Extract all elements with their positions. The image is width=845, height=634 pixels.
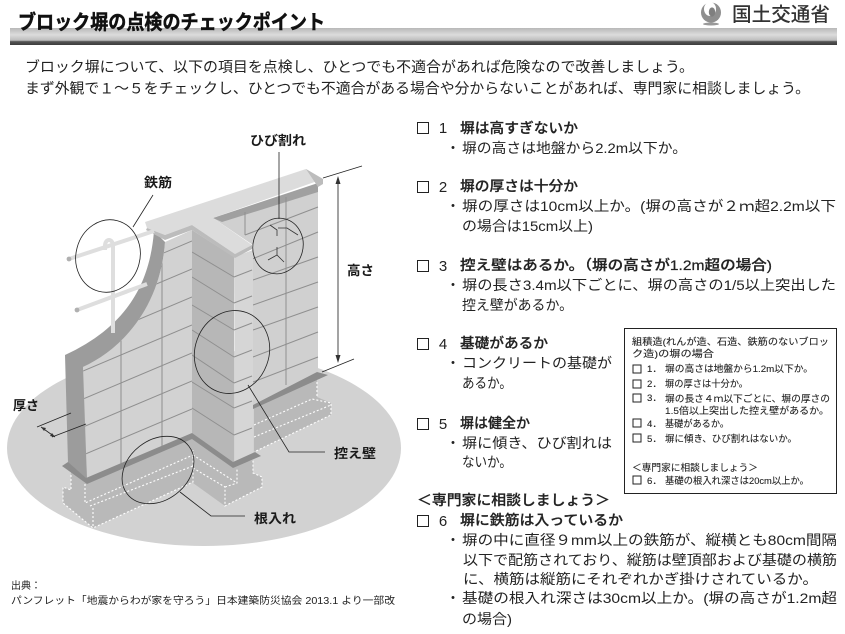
checklist item 2: 塀の厚さは十分か: [460, 178, 578, 194]
header band: [10, 28, 837, 45]
intro text: まず外観で１～５をチェックし、ひとつでも不適合がある場合や分からないことがあれば、専門家に相談しましょう。: [25, 80, 810, 98]
checklist item 2: の場合は15cm以上): [462, 218, 593, 234]
label: 鉄筋: 鉄筋: [144, 175, 172, 190]
leader lines: [133, 152, 325, 516]
checklist item 5: ないか。: [462, 454, 512, 470]
cut section band: [65, 231, 165, 480]
note items: 塀の長さ４ｍ以下ごとに、塀の厚さの: [665, 393, 830, 405]
pier side bricks: [192, 252, 234, 435]
checklist item 3: 塀の長さ3.4m以下ごとに、塀の高さの1/5以上突出した: [462, 277, 836, 293]
note items: 5．: [647, 434, 662, 445]
checklist item 6: 6: [439, 513, 447, 530]
checklist item 3: 控え壁があるか。: [462, 297, 573, 313]
circle: crack: [247, 212, 309, 280]
label: 根入れ: 根入れ: [254, 511, 296, 526]
thickness dimension: [37, 413, 86, 437]
note items: 2．: [647, 379, 662, 390]
checklist item 6: 基礎の根入れ深さは30cm以上か。(塀の高さが1.2m超: [462, 590, 837, 606]
logo: 国土交通省: [701, 2, 830, 26]
checklist item 1: ・: [446, 140, 460, 156]
circle: buttress: [183, 300, 281, 404]
checklist item 3: 控え壁はあるか。（塀の高さが1.2m超の場合): [460, 257, 772, 273]
pier front face: [234, 250, 253, 465]
checklist item 2: 塀の厚さは10cm以上か。(塀の高さが２ｍ超2.2m以下: [462, 198, 836, 214]
checklist item 6: 塀に鉄筋は入っているか: [460, 512, 623, 528]
heading: consult an expert: ＜専門家に相談しましょう＞: [417, 492, 610, 508]
source citation: パンフレット「地震からわが家を守ろう」日本建築防災協会 2013.1 より一部改: [11, 594, 395, 607]
note items: 基礎があるか。: [665, 418, 729, 430]
checklist item 1: 塀の高さは地盤から2.2m以下か。: [462, 140, 687, 156]
note items: 塀の厚さは十分か。: [665, 378, 748, 390]
checklist item 6: 塀の中に直径９mm以上の鉄筋が、縦横とも80cm間隔: [462, 532, 837, 548]
right wall face: [213, 184, 318, 405]
pier foundation: [193, 435, 262, 506]
checklist item 4: あるか。: [462, 375, 512, 391]
right wall bricks: [245, 197, 318, 385]
pier front bricks: [234, 270, 252, 435]
wall base band: [62, 372, 328, 484]
height dimension: [322, 166, 362, 372]
logo: 国土交通省: 国土交通省: [732, 4, 830, 26]
panel: masonry wall note: [624, 328, 836, 494]
checklist item 6: ・: [446, 532, 460, 548]
checklist item 3: [418, 257, 836, 313]
checklist item 2: ・: [446, 198, 460, 214]
checklist item 4: コンクリートの基礎が: [462, 355, 612, 371]
label: 控え壁: 控え壁: [334, 446, 376, 461]
note items: 基礎の根入れ深さは20cm以上か。: [665, 475, 809, 487]
checklist item 4: ・: [446, 355, 460, 371]
note items: 1.5倍以上突出した控え壁があるか。: [665, 405, 829, 417]
source citation: 出典：: [11, 579, 41, 592]
panel: masonry wall note: ク造)の塀の場合: [632, 348, 714, 360]
circle: embedment: [109, 422, 207, 518]
note items: 6．: [647, 476, 662, 487]
checklist item 3: 3: [439, 258, 447, 275]
cap edge: [146, 169, 323, 258]
checklist item 2: [418, 178, 836, 234]
checklist item 6: に、横筋は縦筋にそれぞれかぎ掛けされているか。: [463, 571, 818, 587]
left wall face: [83, 230, 192, 480]
checklist item 1: 1: [439, 120, 447, 137]
note items: 塀の高さは地盤から1.2m以下か。: [665, 363, 813, 375]
illustration: block wall diagram: [7, 133, 401, 546]
checklist item 5: 5: [439, 416, 447, 433]
pier side face: [192, 230, 234, 465]
left wall bricks: [83, 240, 192, 465]
intro text: ブロック塀について、以下の項目を点検し、ひとつでも不適合があれば危険なので改善しましょう。: [25, 58, 694, 76]
checklist item 6: 以下で配筋されており、縦筋は壁頂部および基礎の横筋: [463, 552, 837, 568]
note items: 3．: [647, 393, 662, 404]
ground ellipse: [7, 350, 401, 546]
crack lines: [268, 225, 298, 262]
checklist item 4: [418, 335, 612, 391]
label: ひび割れ: ひび割れ: [250, 133, 306, 148]
checklist item 6: の場合): [462, 611, 512, 627]
rebar end caps: [67, 257, 79, 312]
note items: ＜専門家に相談しましょう＞: [632, 462, 758, 474]
right wall cap shadow: [213, 183, 318, 222]
right foundation: [254, 378, 331, 452]
checklist item 4: 基礎があるか: [460, 335, 548, 351]
note items: 塀に傾き、ひび割れはないか。: [665, 433, 797, 445]
foundation dotted outlines: [63, 382, 331, 528]
wall cap: [145, 169, 323, 254]
checklist item 5: ・: [446, 435, 460, 451]
circle: rebar: [68, 212, 148, 300]
label: 高さ: 高さ: [347, 263, 374, 278]
checklist item 5: 塀に傾き、ひび割れは: [462, 435, 612, 451]
checklist item 4: 4: [439, 336, 447, 353]
intro text: [25, 58, 810, 98]
checklist item 1: [418, 120, 687, 156]
checklist item 2: 2: [439, 179, 447, 196]
title: ブロック塀の点検のチェックポイント: [18, 10, 325, 34]
note heading: 組積造(れんが造、石造、鉄筋のないブロッ: [632, 336, 829, 348]
note items: 1．: [647, 364, 662, 375]
checklist item 5: [418, 415, 612, 470]
note items: [632, 363, 830, 487]
checklist item 5: 塀は健全か: [460, 415, 530, 431]
left foundation: [63, 435, 193, 528]
source citation: [11, 579, 395, 607]
label: 厚さ: 厚さ: [13, 398, 39, 413]
checklist item 3: ・: [446, 277, 460, 293]
checklist item 1: 塀は高すぎないか: [460, 120, 578, 136]
checklist item 6: ・: [446, 590, 460, 606]
note items: 4．: [647, 419, 662, 430]
rebar: [69, 231, 154, 333]
checklist item 6: [418, 512, 837, 627]
